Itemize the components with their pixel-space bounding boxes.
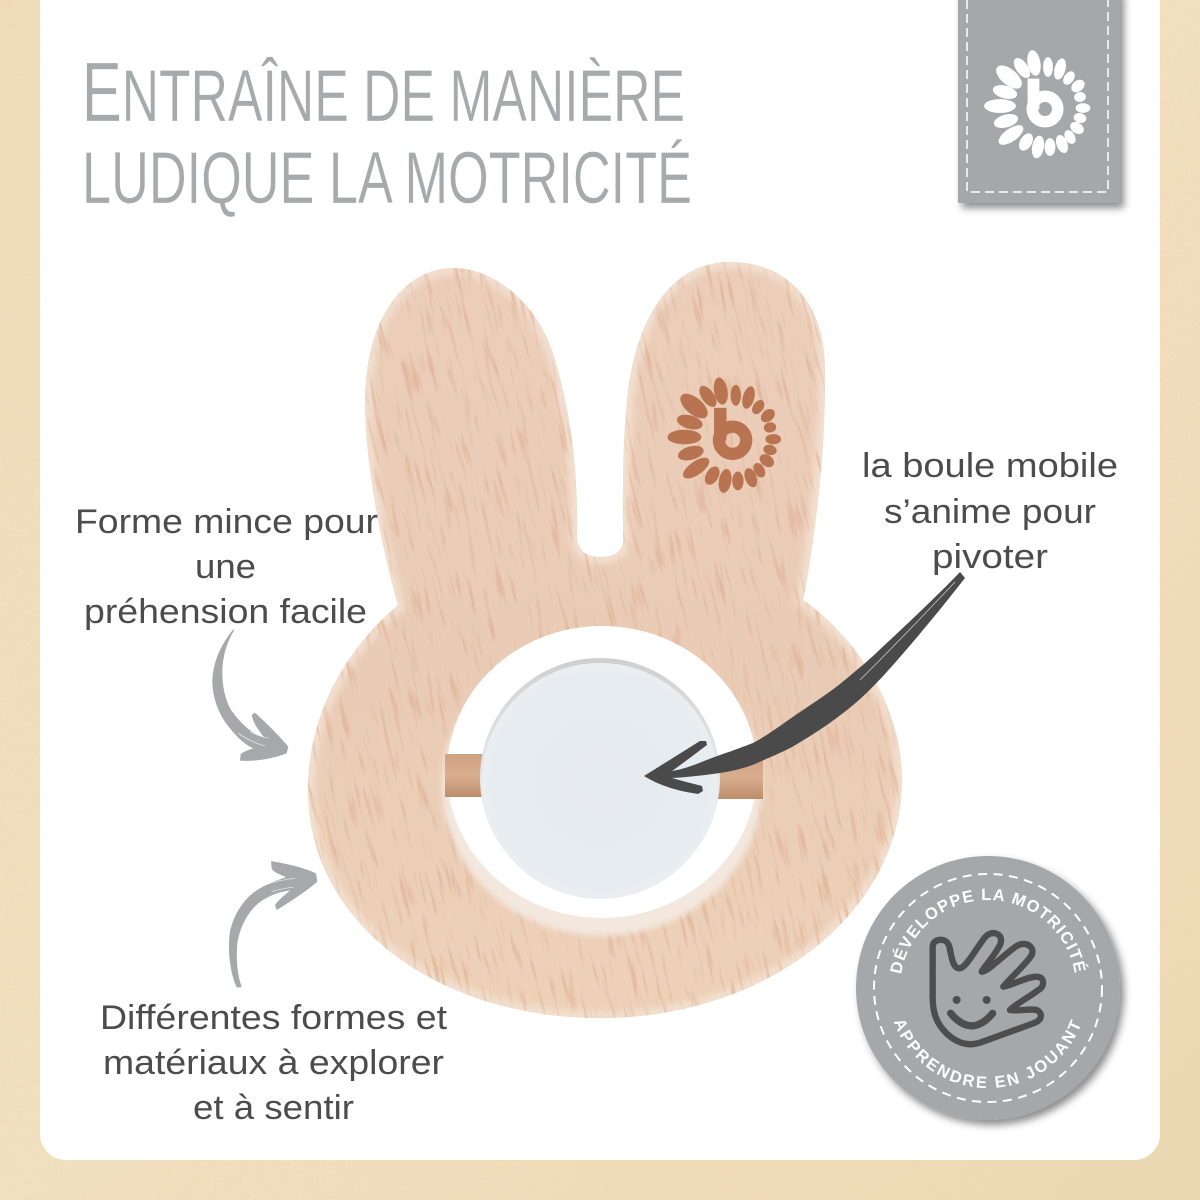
arrow: slim shape to toy [212,629,288,761]
text: mobile ball: pivoter [932,538,1048,576]
icon: smiling hand [933,933,1043,1044]
text: mobile ball: la boule mobile [862,447,1118,485]
title [82,45,692,219]
rabbit body [308,262,902,1018]
arrow: mobile ball pointer [644,572,965,794]
icon: engraved logo on ear [668,377,781,494]
text: slim shape: Forme mince pour [75,503,378,541]
arrow: different shapes to toy [229,861,317,987]
badge text top: DÉVELOPPE LA MOTRICITÉ [890,888,1088,974]
badge text bottom: APPRENDRE EN JOUANT [894,1019,1080,1088]
title: ENTRAÎNE DE MANIÈRE [82,45,685,139]
mobile ball [480,658,720,899]
text: mobile ball: s’anime pour [884,493,1096,531]
text: different shapes: Différentes formes et [100,999,448,1037]
wooden rabbit toy [308,262,902,1018]
text: slim shape: une [195,548,256,586]
brand tag [958,0,1120,203]
text: different shapes [100,999,448,1127]
icon: brand flower logo [984,50,1090,159]
text: mobile ball [862,447,1118,576]
text: slim shape [75,503,378,631]
hole with bevel [442,626,762,936]
title: LUDIQUE LA MOTRICITÉ [82,138,692,219]
text: different shapes: matériaux à explorer [103,1044,444,1082]
wooden dowel [445,754,763,799]
text: slim shape: préhension facile [84,593,367,631]
text: different shapes: et à sentir [193,1089,354,1127]
badge: develops motor skills [854,856,1130,1130]
